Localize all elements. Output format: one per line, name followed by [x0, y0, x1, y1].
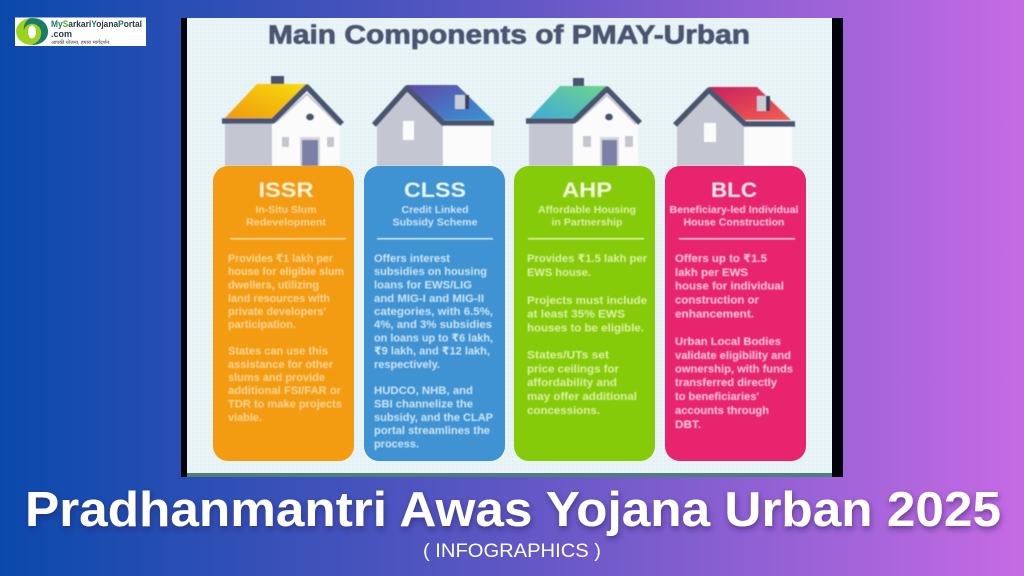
- subtitle: ISSR: [246, 204, 327, 228]
- body text: AHP: at least 35% EWS: [527, 308, 625, 320]
- subtitle: BLC: Beneficiary-led Individual: [670, 204, 799, 216]
- subtitle: AHP: [538, 204, 636, 228]
- subtitle: CLSS: Subsidy Scheme: [392, 216, 478, 228]
- body text: ISSR: slums and provide: [228, 372, 325, 384]
- subtitle: AHP: in Partnership: [552, 216, 622, 228]
- heading: BLC: BLC: [711, 179, 757, 202]
- house: AHP: [526, 78, 640, 166]
- heading: ISSR: ISSR: [258, 179, 314, 202]
- body text: BLC: accounts through: [675, 405, 769, 417]
- body text: CLSS: 4%, and 3% subsidies: [374, 319, 492, 331]
- main title: Pradhanmantri Awas Yojana Urban 2025: [25, 483, 1001, 537]
- body text: BLC: ownership, with funds: [675, 364, 793, 376]
- body text: CLSS: HUDCO, NHB, and: [374, 385, 473, 397]
- body text: ISSR: TDR to make projects: [228, 398, 342, 410]
- body text: BLC: Offers up to ₹1.5: [675, 253, 767, 265]
- body text: CLSS: Offers interest: [374, 253, 450, 265]
- infographic image frame: [181, 18, 843, 477]
- body text: CLSS: process.: [374, 438, 419, 450]
- logo: [15, 18, 146, 46]
- subtitle: ( INFOGRAPHICS ): [423, 541, 601, 562]
- heading: CLSS: CLSS: [404, 179, 466, 202]
- logo: आपकी योजना, हमारा मार्गदर्शन: [51, 39, 109, 46]
- body text: BLC: lakh per EWS: [675, 267, 748, 279]
- subtitle: BLC: [670, 204, 799, 228]
- body text: BLC: Urban Local Bodies: [675, 336, 781, 348]
- body text: CLSS: SBI channelize the: [374, 398, 473, 410]
- subtitle: BLC: House Construction: [684, 216, 784, 228]
- body text: BLC: house for individual: [675, 280, 784, 292]
- body text: BLC: DBT.: [675, 419, 701, 431]
- body text: BLC: construction or: [675, 294, 760, 306]
- body text: AHP: price ceilings for: [527, 364, 620, 376]
- logo: .com: [51, 29, 72, 39]
- body text: BLC: validate eligibility and: [675, 350, 791, 362]
- body text: ISSR: land resources with: [228, 293, 330, 305]
- body text: BLC: transferred directly: [675, 377, 778, 389]
- body text: ISSR: viable.: [228, 412, 262, 424]
- body text: AHP: Provides ₹1.5 lakh per: [527, 253, 648, 265]
- subtitle: ISSR: Redevelopment: [246, 216, 327, 228]
- body text: CLSS: respectively.: [374, 359, 440, 371]
- body text: CLSS: on loans up to ₹6 lakh,: [374, 332, 493, 344]
- body text: ISSR: house for eligible slum: [228, 266, 344, 278]
- panel: CLSS: [364, 166, 505, 461]
- body text: CLSS: [374, 253, 493, 450]
- body text: ISSR: participation.: [228, 319, 296, 331]
- body text: AHP: houses to be eligible.: [527, 322, 644, 334]
- logo: MySarkariYojanaPortal: [51, 19, 142, 29]
- body text: AHP: [527, 253, 648, 417]
- body text: AHP: may offer additional: [527, 391, 637, 403]
- subtitle: AHP: Affordable Housing: [538, 204, 636, 216]
- body text: CLSS: subsidies on housing: [374, 266, 487, 278]
- panel: ISSR: [213, 166, 354, 461]
- body text: ISSR: assistance for other: [228, 359, 334, 371]
- panel: AHP: [514, 166, 655, 461]
- panel: BLC: [665, 166, 806, 461]
- body text: CLSS: loans for EWS/LIG: [374, 280, 472, 292]
- body text: AHP: affordability and: [527, 377, 617, 389]
- heading: AHP: AHP: [562, 179, 612, 202]
- body text: ISSR: [228, 253, 344, 424]
- body text: ISSR: private developers': [228, 306, 326, 318]
- body text: AHP: concessions.: [527, 405, 600, 417]
- body text: AHP: Projects must include: [527, 295, 647, 307]
- body text: ISSR: States can use this: [228, 346, 328, 358]
- house: CLSS: [374, 85, 494, 166]
- body text: AHP: States/UTs set: [527, 350, 609, 362]
- body text: BLC: enhancement.: [675, 308, 754, 320]
- subtitle: CLSS: [392, 204, 478, 228]
- body text: ISSR: Provides ₹1 lakh per: [228, 253, 334, 265]
- body text: BLC: [675, 253, 793, 431]
- house: ISSR: [222, 76, 342, 166]
- infographic title: Main Components of PMAY-Urban: [268, 22, 750, 50]
- body text: CLSS: ₹9 lakh, and ₹12 lakh,: [374, 346, 490, 358]
- body text: AHP: EWS house.: [527, 267, 591, 279]
- body text: ISSR: additional FSI/FAR or: [228, 385, 342, 397]
- house: BLC: [675, 87, 795, 166]
- body text: CLSS: portal streamlines the: [374, 425, 490, 437]
- body text: ISSR: dwellers, utilizing: [228, 280, 319, 292]
- body text: CLSS: and MIG-I and MIG-II: [374, 293, 484, 305]
- body text: CLSS: subsidy, and the CLAP: [374, 412, 493, 424]
- body text: BLC: to beneficiaries': [675, 391, 759, 403]
- subtitle: CLSS: Credit Linked: [402, 204, 468, 216]
- body text: CLSS: categories, with 6.5%,: [374, 306, 493, 318]
- subtitle: ISSR: In-Situ Slum: [256, 204, 316, 216]
